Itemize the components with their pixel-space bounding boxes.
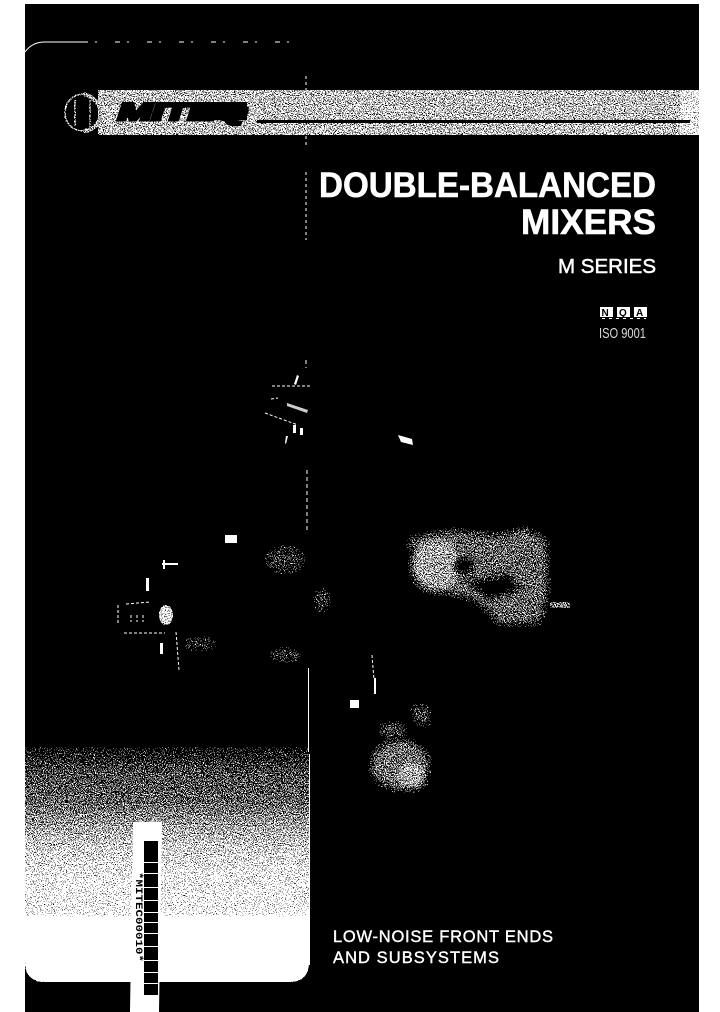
photo highlights [146, 375, 413, 708]
logo wordmark: MITEQ [118, 99, 248, 126]
barcode bars [144, 841, 158, 995]
certification mark: Q [619, 308, 627, 319]
footer tagline second line: AND SUBSYSTEMS [333, 949, 499, 967]
title second line: MIXERS [521, 203, 656, 242]
barcode number: *MITEC00010* [132, 872, 144, 962]
footer tagline: LOW-NOISE FRONT ENDS [333, 928, 553, 946]
certification mark: A [636, 308, 643, 319]
mixer photo: faint central parts [185, 548, 328, 660]
vertical fold line [306, 76, 310, 965]
footer tagline [333, 928, 553, 967]
panel outline top [25, 42, 88, 52]
ISO label: ISO 9001 [599, 325, 646, 342]
certification mark: N [602, 308, 609, 319]
right tail [550, 602, 570, 608]
barcode sticker [130, 822, 162, 1012]
title [319, 166, 656, 242]
mixer photo: large body [408, 529, 547, 624]
certification mark [600, 307, 647, 319]
mixer photo: lower body [372, 708, 428, 789]
header band [98, 90, 699, 135]
title bar rule [257, 120, 690, 123]
logo emblem [65, 94, 101, 131]
barcode gaps [144, 862, 158, 984]
series label: M SERIES [558, 255, 656, 278]
panel outline dashes [51, 41, 300, 43]
connector blob [159, 605, 173, 625]
band bright end [680, 90, 699, 135]
connector outlines [118, 386, 374, 680]
logo wordmark [118, 99, 248, 126]
gradient panel [25, 745, 309, 982]
title: DOUBLE-BALANCED [319, 166, 656, 205]
